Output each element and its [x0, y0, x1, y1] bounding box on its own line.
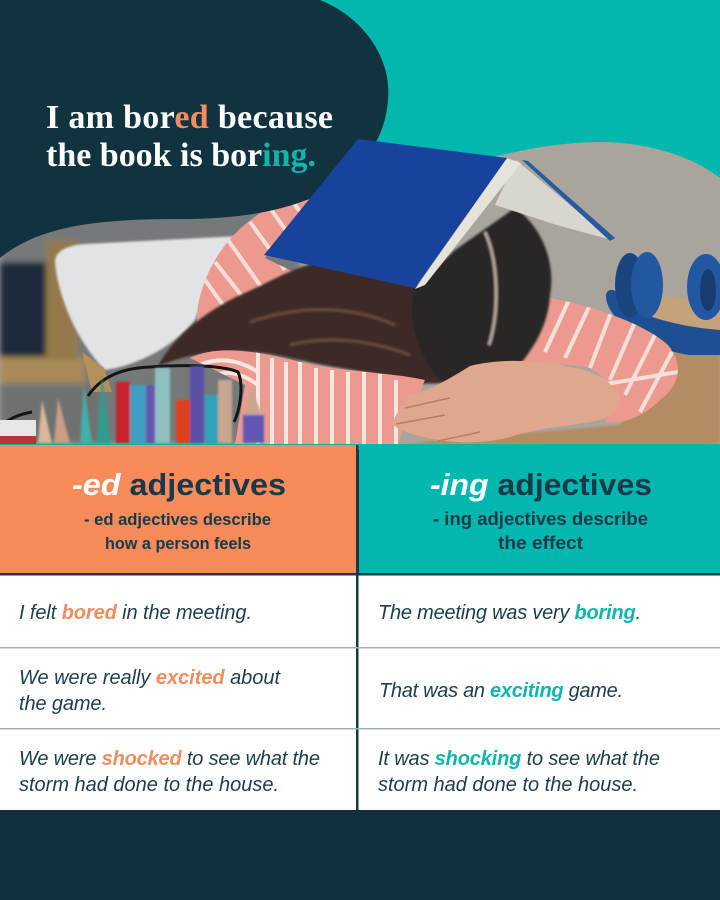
row 3 left — [19, 748, 320, 796]
row 2 left: We were really excited about — [19, 667, 281, 689]
description: -ing: - ing adjectives describe — [433, 508, 648, 529]
row 3 left: storm had done to the house. — [19, 774, 279, 796]
footer band — [0, 810, 720, 900]
table: examples — [0, 445, 720, 810]
row 3 left: We were shocked to see what the — [19, 748, 320, 770]
sweater: lower arm — [190, 350, 425, 444]
row 3 right: storm had done to the house. — [378, 774, 638, 796]
icon: open blue book on head — [264, 139, 615, 289]
title — [46, 99, 333, 174]
panel: -ing header — [359, 445, 720, 573]
description: -ing — [433, 508, 648, 553]
heading: -ing adjectives: -ing adjectives — [430, 467, 652, 502]
hair — [158, 208, 551, 384]
row 2 right: That was an exciting game. — [379, 680, 623, 702]
icon: headphones — [606, 252, 720, 355]
photo: bored girl at desk — [0, 140, 720, 445]
desk — [400, 352, 720, 444]
sweater: upper arm — [196, 200, 308, 324]
photo backdrop wall — [0, 140, 720, 444]
row 3 right: It was shocking to see what the — [378, 748, 660, 770]
sweater: right arm — [521, 298, 678, 422]
heading: -ed adjectives: -ed adjectives — [72, 467, 286, 502]
title: the book is boring. — [46, 137, 316, 174]
hand — [392, 361, 620, 442]
description: -ed: - ed adjectives describe — [84, 511, 271, 529]
background: teal top — [0, 0, 720, 450]
dark curved title blob — [0, 0, 388, 258]
row 1 right: The meeting was very boring. — [378, 602, 641, 624]
description: -ed — [84, 511, 271, 553]
hair parting — [485, 232, 496, 345]
pencils and glasses — [0, 366, 264, 444]
icon: white chair — [55, 236, 240, 392]
title: I am bored because — [46, 99, 333, 136]
panel: -ed header — [0, 445, 357, 573]
description: -ing: the effect — [498, 532, 583, 553]
description: -ed: how a person feels — [105, 535, 251, 553]
row 3 right — [378, 748, 660, 796]
row 1 left: I felt bored in the meeting. — [19, 602, 252, 624]
left room background — [0, 200, 300, 444]
row 2 left — [19, 667, 281, 715]
row 2 left: the game. — [19, 693, 107, 715]
